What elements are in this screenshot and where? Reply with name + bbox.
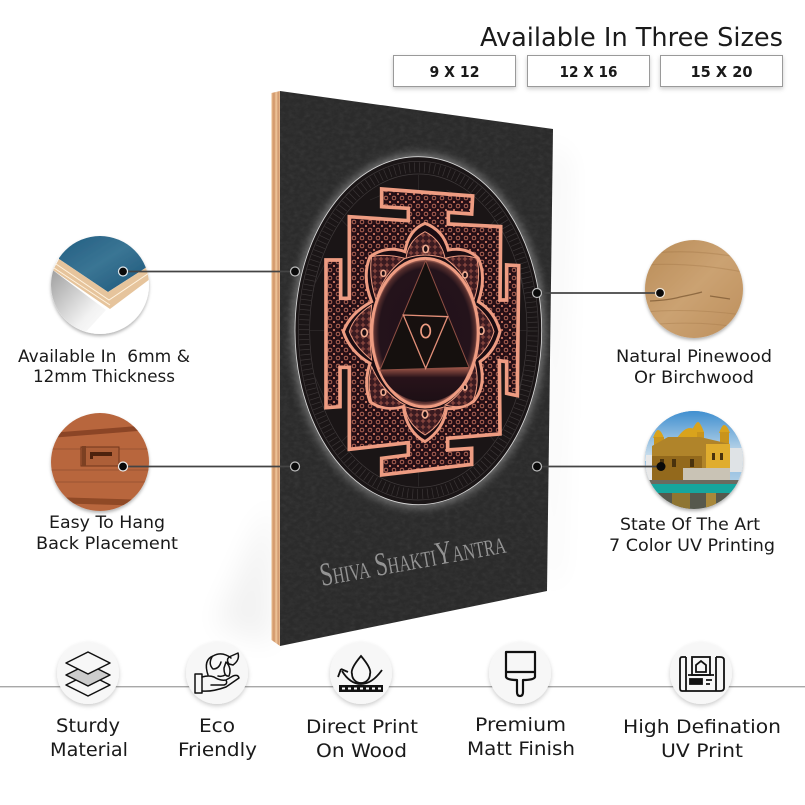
icon: stacked layers — [57, 642, 119, 704]
label: thickness: 12mm Thickness — [33, 367, 175, 386]
label: matt finish: Premium — [475, 714, 566, 736]
label: matt finish: Matt Finish — [467, 738, 575, 760]
feature: matt finish — [467, 642, 575, 760]
label: wood type: Or Birchwood — [634, 368, 754, 387]
feature: sturdy material — [50, 642, 128, 761]
central circle — [372, 258, 478, 407]
label: thickness — [18, 347, 190, 386]
image: pine wood — [645, 240, 743, 338]
label: direct print — [306, 716, 418, 762]
label: wood type: Natural Pinewood — [616, 347, 772, 366]
feature strip divider — [0, 686, 805, 687]
label: sturdy material — [50, 715, 128, 761]
size button: 15 x 20: 15 X 20 — [690, 63, 753, 81]
feature: direct print — [306, 642, 418, 762]
lotus petals — [343, 223, 500, 442]
label: wood type — [616, 347, 772, 387]
label: sturdy material: Material — [50, 739, 128, 761]
wooden board with yantra print — [270, 85, 560, 655]
inverted inner triangle — [403, 315, 448, 368]
label: back placement: Back Placement — [36, 534, 179, 553]
label: eco friendly: Friendly — [178, 739, 257, 761]
label: direct print: On Wood — [316, 740, 407, 762]
icon: paint brush — [489, 642, 551, 704]
callout: wood type — [532, 240, 772, 387]
label: uv printing: 7 Color UV Printing — [609, 536, 775, 555]
label: high definition uv print: High Defination — [623, 716, 781, 738]
label: eco friendly: Eco — [199, 715, 235, 737]
board face: slate background — [270, 85, 560, 655]
outer mandala circle — [292, 154, 544, 507]
callout: thickness — [18, 230, 300, 386]
board edge: plywood side — [272, 91, 280, 646]
leader line: back placement — [118, 462, 300, 471]
lower crescent band — [380, 367, 469, 402]
size button: 12 x 16: 12 X 16 — [560, 63, 618, 81]
icon: hand with globe and leaf — [186, 642, 248, 704]
size options — [394, 56, 782, 86]
size button: 9 x 12: 9 X 12 — [430, 63, 480, 81]
print title: Shiva ShaktiYantra — [317, 525, 509, 594]
label: high definition uv print — [623, 716, 781, 762]
bindu ring — [421, 324, 430, 338]
size button: 12 x 16 — [528, 56, 650, 86]
bhupura square gates — [326, 189, 519, 475]
label: eco friendly — [178, 715, 257, 761]
label: high definition uv print: UV Print — [661, 740, 743, 762]
feature: eco friendly — [178, 642, 257, 761]
callout: back placement — [36, 413, 300, 553]
shakti triangle — [380, 261, 469, 370]
label: matt finish — [467, 714, 575, 760]
feature: high definition uv print — [623, 642, 781, 762]
label: direct print: Direct Print — [306, 716, 418, 738]
callout: uv printing — [532, 411, 775, 555]
label: sturdy material: Sturdy — [56, 715, 120, 737]
label: uv printing — [609, 515, 775, 555]
heading: available sizes: Available In Three Sizes — [480, 23, 783, 53]
image: plywood corner — [48, 230, 152, 334]
board shadow — [215, 140, 566, 645]
label: back placement: Easy To Hang — [49, 513, 165, 532]
image: golden temple — [645, 411, 744, 509]
icon: uv printer — [670, 642, 732, 704]
image: hanging bracket — [50, 413, 150, 511]
leader line: uv printing — [532, 462, 666, 471]
label: thickness: Available In 6mm & — [18, 347, 190, 366]
label: back placement — [36, 513, 179, 553]
label: uv printing: State Of The Art — [620, 515, 761, 534]
leader line: thickness — [118, 267, 300, 276]
yantra artwork — [292, 154, 544, 507]
icon: ink drop on wood — [330, 642, 392, 704]
size button: 15 x 20 — [660, 56, 782, 86]
size button: 9 x 12 — [394, 56, 516, 86]
leader line: wood type — [532, 288, 664, 298]
